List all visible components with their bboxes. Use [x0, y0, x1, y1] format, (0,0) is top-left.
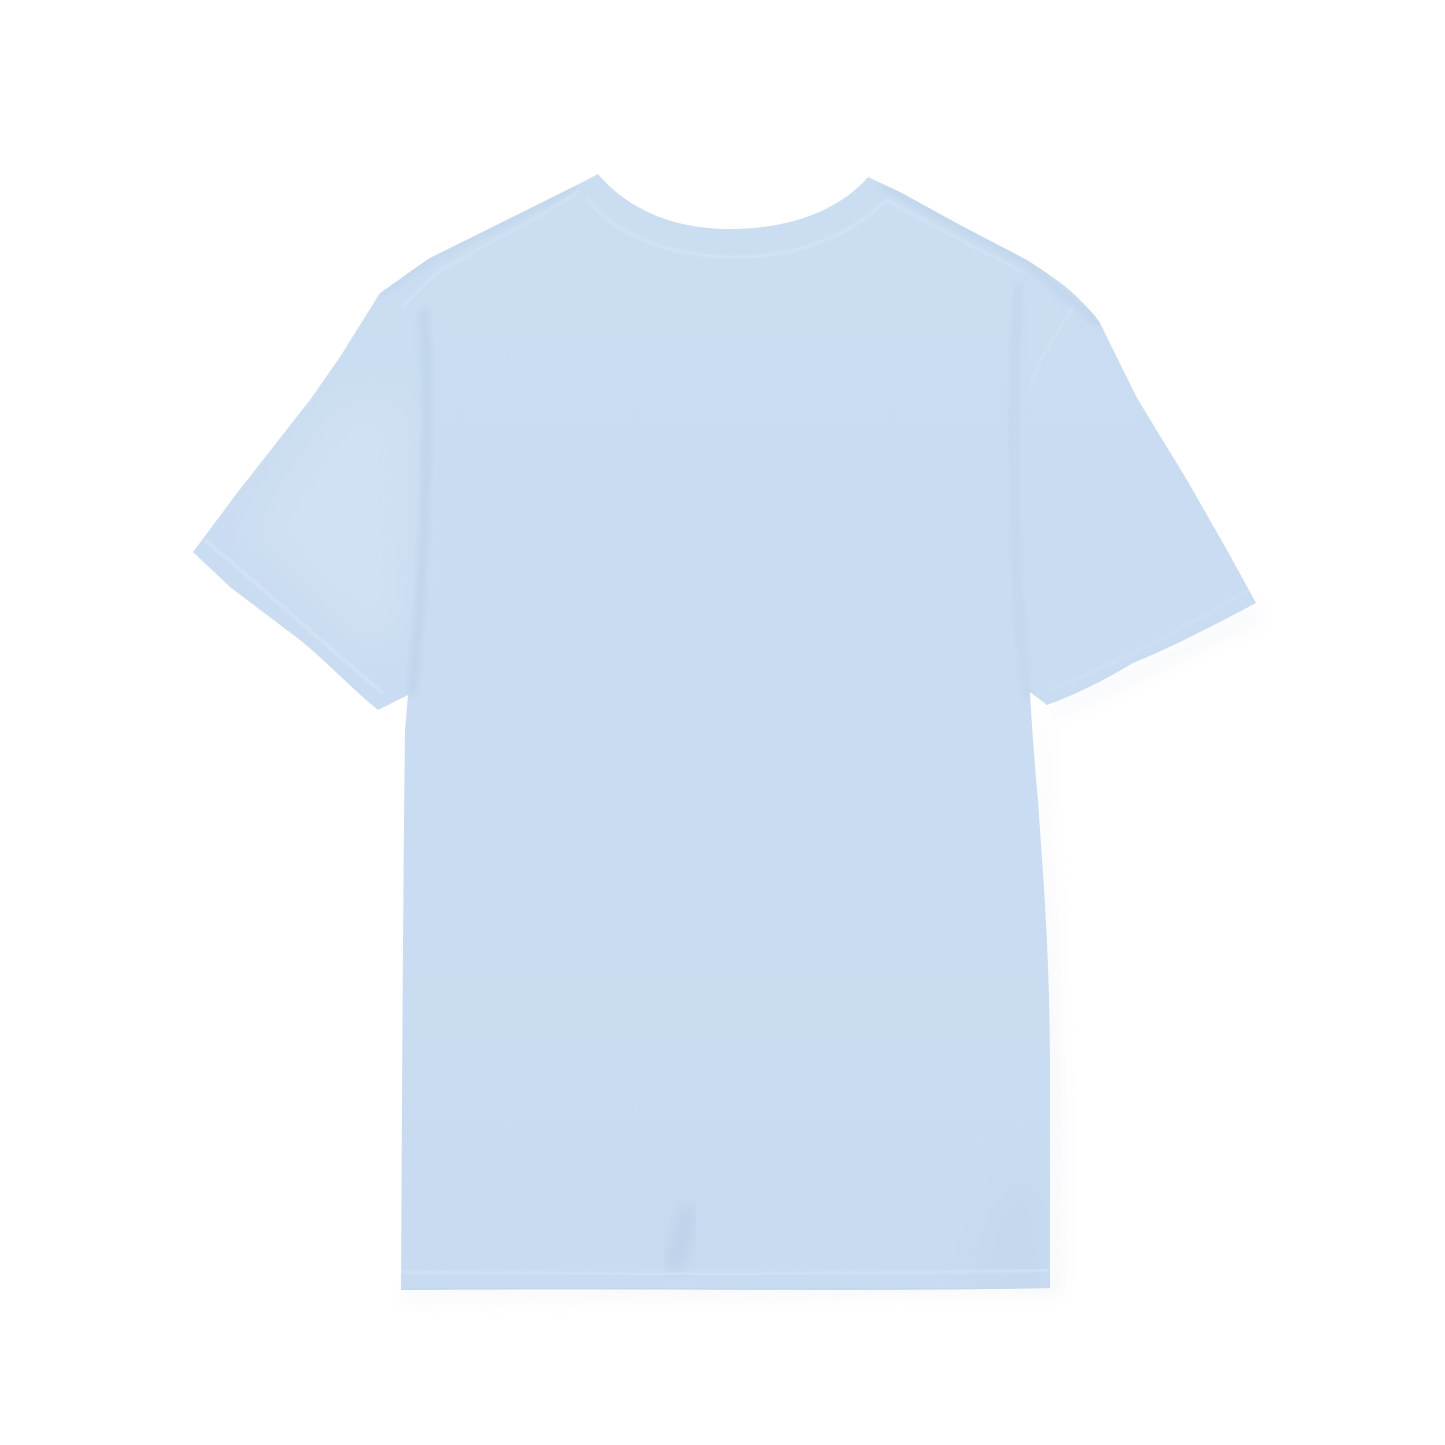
product photo: light blue t-shirt back view — [193, 174, 1256, 1290]
left sleeve hem stitch — [205, 540, 383, 693]
shoulder edge shade, right — [880, 184, 1100, 325]
collar rib stitching — [587, 198, 887, 257]
left sleeve highlight — [250, 400, 410, 650]
bottom hem stitch — [672, 1270, 1046, 1274]
shirt — [193, 174, 1256, 1290]
lower right body shading — [960, 1180, 1050, 1290]
fabric shading and folds — [280, 184, 1098, 1290]
shoulder edge shade, left — [380, 186, 577, 294]
right shoulder seam — [887, 200, 1023, 272]
right sleeve hem stitch — [1050, 590, 1248, 690]
soft drop shadow around shirt — [402, 606, 1262, 1300]
hem bottom edge shade — [401, 1288, 1050, 1290]
right sleeve seam — [1030, 307, 1073, 390]
right armhole shadow — [1014, 285, 1028, 700]
left shoulder seam — [402, 190, 580, 307]
shirt silhouette — [193, 174, 1256, 1290]
centre bottom crease — [672, 1205, 688, 1268]
left armhole shadow — [412, 310, 427, 695]
